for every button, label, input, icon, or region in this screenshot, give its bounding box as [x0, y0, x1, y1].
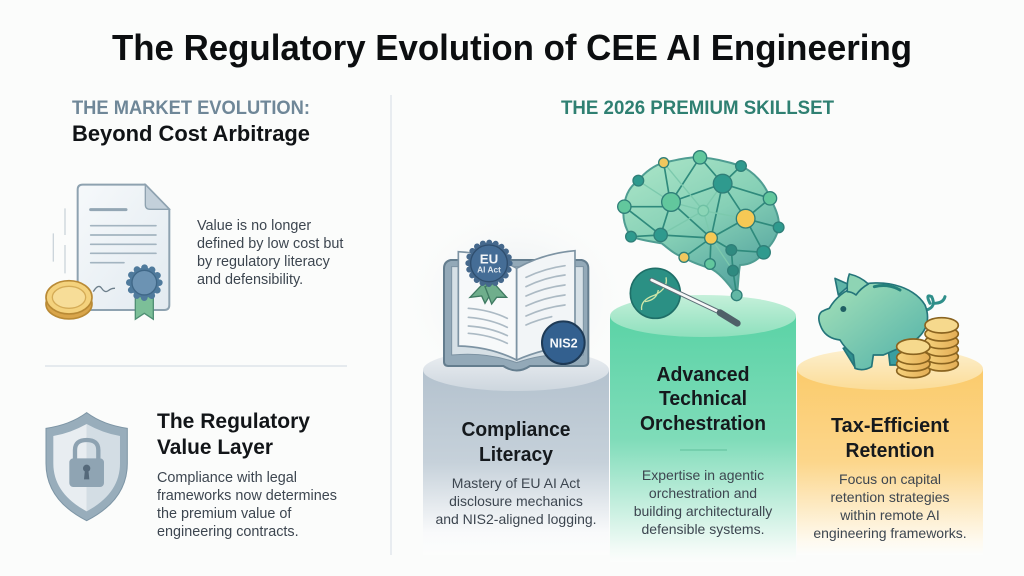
podium: advanced technical orchestration	[610, 151, 796, 562]
text: orchestration description: building architecturally	[634, 503, 772, 519]
text: retention description: Focus on capital	[839, 471, 941, 487]
title: The Regulatory Evolution of CEE AI Engineering	[112, 27, 912, 68]
text: compliance description	[435, 475, 597, 527]
text block: value statement: Value is no longer	[197, 218, 311, 234]
text block: value statement	[197, 218, 343, 288]
book icon: EU	[480, 251, 498, 266]
heading: compliance literacy: Compliance	[462, 419, 570, 441]
heading: market evolution	[72, 98, 310, 146]
text: orchestration description: defensible systems.	[642, 521, 764, 537]
piggy bank icon	[819, 274, 958, 378]
text block: compliance: engineering contracts.	[157, 524, 299, 540]
text block: compliance: Compliance with legal	[157, 470, 297, 486]
heading: premium skillset: THE 2026 PREMIUM SKILLSET	[561, 98, 834, 119]
text: retention description: retention strategies	[830, 489, 950, 505]
heading: advanced technical orchestration: Orchestration	[640, 413, 766, 435]
heading: tax-efficient retention	[831, 415, 949, 462]
brain network icon	[618, 151, 784, 301]
heading: compliance literacy: Literacy	[479, 444, 554, 466]
heading: tax-efficient retention: Retention	[846, 440, 934, 462]
heading: regulatory value layer: The Regulatory	[157, 410, 310, 433]
text block: compliance	[157, 470, 337, 540]
text block: value statement: by regulatory literacy	[197, 254, 331, 270]
text: retention description: within remote AI	[839, 507, 940, 523]
icon: orb with baton	[630, 268, 737, 323]
podium: tax-efficient retention	[797, 274, 983, 555]
podium: compliance literacy	[423, 243, 609, 555]
text: orchestration description: orchestration and	[649, 485, 757, 501]
text: compliance description: Mastery of EU AI Act	[452, 475, 580, 491]
heading: advanced technical orchestration: Advanced	[656, 364, 750, 386]
heading: regulatory value layer: Value Layer	[157, 436, 273, 459]
text block: compliance: the premium value of	[157, 506, 292, 522]
heading: compliance literacy	[462, 419, 570, 466]
text: orchestration description	[634, 467, 772, 537]
text: retention description: engineering frameworks.	[813, 525, 967, 541]
text: compliance description: and NIS2-aligned logging.	[435, 511, 597, 527]
heading: regulatory value layer	[157, 410, 310, 459]
book icon: NIS2	[550, 336, 578, 350]
text block: value statement: and defensibility.	[197, 272, 303, 288]
heading: tax-efficient retention: Tax-Efficient	[831, 415, 949, 437]
text: compliance description: disclosure mechanics	[449, 493, 583, 509]
icon: shield with padlock	[46, 413, 127, 521]
heading: advanced technical orchestration: Technical	[659, 388, 747, 410]
text: retention description	[813, 471, 967, 541]
heading: market evolution: THE MARKET EVOLUTION:	[72, 98, 310, 119]
text block: compliance: frameworks now determines	[157, 488, 337, 504]
icon: contract document with coin and seal	[46, 185, 169, 319]
heading: advanced technical orchestration	[640, 364, 766, 435]
text: orchestration description: Expertise in agentic	[642, 467, 764, 483]
book icon: AI Act	[477, 265, 501, 275]
book icon	[444, 243, 588, 370]
text block: value statement: defined by low cost but	[197, 236, 343, 252]
heading: market evolution: Beyond Cost Arbitrage	[72, 121, 310, 146]
